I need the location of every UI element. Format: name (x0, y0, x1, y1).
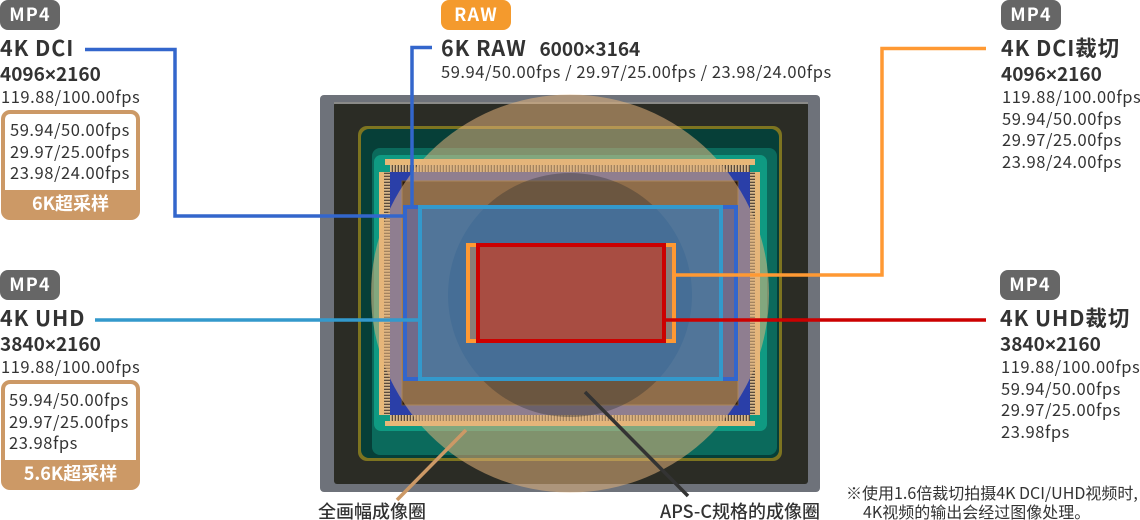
frame rates: 23.98fps (1001, 419, 1070, 443)
resolution: 4096×2160 (1001, 60, 1102, 87)
connector: 6K RAW (412, 48, 432, 206)
footnote (846, 480, 1138, 520)
frame rates: 29.97/25.00fps (10, 139, 130, 163)
badge: MP4: MP4 (1009, 271, 1051, 297)
pointer: full-frame circle (397, 430, 466, 500)
frame rates: 119.88/100.00fps (1001, 354, 1140, 378)
connector: 4K DCI crop (676, 48, 986, 275)
badge: MP4: MP4 (1010, 1, 1052, 27)
resolution: 3840×2160 (1000, 330, 1101, 357)
heading: 4K UHD crop: 4K UHD裁切 (1000, 302, 1130, 333)
label: 5.6K oversampling: 5.6K超采样 (24, 460, 117, 486)
badge: MP4 (0, 0, 60, 30)
frame rates: 59.94/50.00fps (1002, 106, 1122, 130)
oversampling box (1, 110, 140, 220)
frame rate: 119.88/100.00fps (1, 354, 140, 378)
heading: 6K RAW: 6K RAW 6000×3164 (441, 32, 640, 63)
resolution: 4096×2160 (0, 60, 101, 87)
frame rates: 59.94/50.00fps / 29.97/25.00fps / 23.98/24.00fps (441, 59, 832, 83)
pointer: APS-C circle (585, 392, 688, 496)
frame rates (5, 114, 136, 190)
footnote: ※使用1.6倍裁切拍摄4K DCI/UHD视频时, (846, 480, 1138, 504)
heading: 4K DCI crop: 4K DCI裁切 (1001, 32, 1120, 63)
APS-C image circle (448, 173, 692, 417)
badge: MP4 (0, 270, 60, 300)
connector: 4K UHD (95, 318, 418, 322)
frame rates: 59.94/50.00fps (1001, 376, 1121, 400)
frame rates (5, 384, 136, 460)
badge: MP4: MP4 (9, 271, 51, 297)
panel: 4K UHD crop (1000, 270, 1140, 443)
frame rates: 23.98/24.00fps (10, 160, 130, 184)
frame rates: 119.88/100.00fps (1002, 84, 1140, 108)
badge: MP4: MP4 (9, 1, 51, 27)
frame rates: 29.97/25.00fps (1001, 397, 1121, 421)
4K DCI strips (407, 209, 734, 377)
badge: MP4 (1000, 270, 1060, 300)
4K DCI crop frame (468, 245, 674, 341)
connector: 4K DCI (85, 50, 405, 216)
frame rate: 119.88/100.00fps (1, 84, 140, 108)
frame rates: 29.97/25.00fps (9, 409, 129, 433)
frame rates: 59.94/50.00fps (10, 117, 130, 141)
oversampling box (1, 380, 140, 490)
full-frame image circle (371, 94, 769, 492)
frame rates: 59.94/50.00fps (9, 387, 129, 411)
badge: MP4 (1001, 0, 1061, 30)
connector: 4K UHD crop (666, 318, 986, 322)
panel: 6K RAW (441, 0, 832, 83)
label: 6K oversampling: 6K超采样 (32, 190, 109, 216)
panel: 4K DCI crop (1001, 0, 1140, 173)
frame rates (1002, 84, 1140, 173)
panel: 4K UHD (0, 270, 140, 490)
4K DCI frame (405, 207, 736, 379)
4K UHD crop frame (478, 245, 664, 341)
sensor body (320, 95, 820, 492)
badge: RAW: RAW (454, 1, 498, 27)
frame rates (1001, 354, 1140, 443)
resolution: 3840×2160 (0, 330, 101, 357)
frame rates: 23.98/24.00fps (1002, 149, 1122, 173)
frame rates: 23.98fps (9, 430, 78, 454)
heading: 4K UHD: 4K UHD (0, 302, 85, 333)
panel: 4K DCI (0, 0, 140, 220)
heading: 4K DCI: 4K DCI (0, 32, 74, 63)
4K UHD frame (420, 207, 721, 379)
badge: RAW (441, 0, 511, 30)
frame rates: 29.97/25.00fps (1002, 127, 1122, 151)
